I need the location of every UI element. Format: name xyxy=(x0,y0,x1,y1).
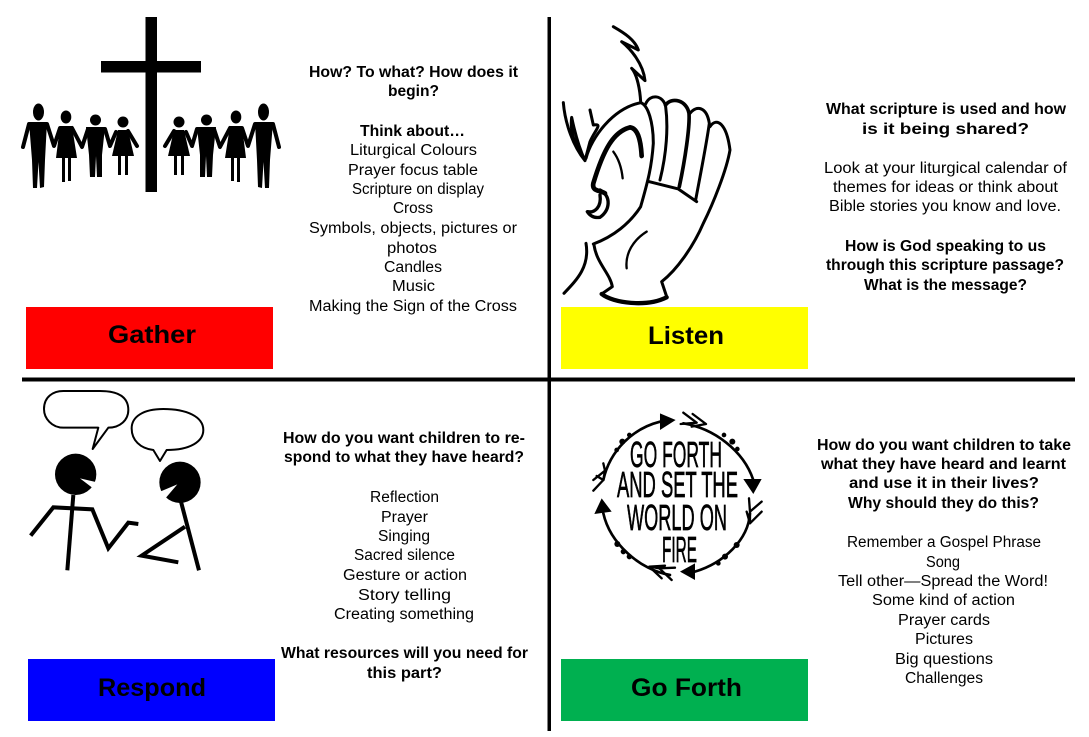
text block: Gather prompts: Scripture on display xyxy=(352,181,484,198)
text block: Listen prompts: Look at your liturgical calendar of xyxy=(824,160,1068,177)
text block: Listen prompts: through this scripture passage? xyxy=(826,257,1064,274)
text block: Go Forth prompts: and use it in their lives? xyxy=(849,475,1039,492)
panel: Listen xyxy=(561,27,1068,369)
text block: Gather prompts: Liturgical Colours xyxy=(350,142,477,159)
text block: Respond prompts: Prayer xyxy=(381,509,428,526)
text block: Listen prompts: What scripture is used and how xyxy=(826,101,1067,118)
icon: circle of arrows with slogan: AND SET THE xyxy=(617,464,738,505)
heading: Go Forth: Go Forth xyxy=(631,674,742,702)
text block: Gather prompts: How? To what? How does it xyxy=(309,64,518,81)
text block: Respond prompts: Reflection xyxy=(370,489,439,506)
text block: Respond prompts: Gesture or action xyxy=(343,567,467,584)
text block: Respond prompts: spond to what they have heard? xyxy=(284,449,524,466)
text block: Respond prompts: Sacred silence xyxy=(354,547,455,564)
text block: Respond prompts: How do you want children to re- xyxy=(283,430,525,447)
text block: Gather prompts: photos xyxy=(387,240,437,257)
text block: Gather prompts: Making the Sign of the Cross xyxy=(309,298,517,315)
text block: Go Forth prompts: Prayer cards xyxy=(898,612,990,629)
text block: Listen prompts: How is God speaking to us xyxy=(845,238,1046,255)
text block: Go Forth prompts xyxy=(817,437,1071,687)
icon: cross with people holding hands xyxy=(23,17,279,192)
text block: Respond prompts: Story telling xyxy=(358,587,451,604)
panel: Go Forth xyxy=(561,413,1071,721)
icon: circle of arrows with slogan: FIRE xyxy=(662,529,697,570)
text block: Gather prompts: Music xyxy=(392,278,435,295)
text block: Go Forth prompts: Some kind of action xyxy=(872,592,1015,609)
icon: hand cupped to ear xyxy=(563,27,730,303)
heading: Respond xyxy=(28,659,275,721)
text block: Gather prompts: Think about… xyxy=(360,123,465,140)
heading: Listen xyxy=(561,307,808,369)
text block: Go Forth prompts: Remember a Gospel Phrase xyxy=(847,534,1041,551)
text block: Respond prompts: Creating something xyxy=(334,606,474,623)
text block: Go Forth prompts: Tell other—Spread the Word! xyxy=(838,573,1048,590)
text block: Go Forth prompts: Song xyxy=(926,554,960,571)
text block: Gather prompts: begin? xyxy=(388,83,439,100)
heading: Listen: Listen xyxy=(648,322,724,350)
text block: Go Forth prompts: Why should they do this? xyxy=(848,495,1039,512)
text block: Respond prompts: this part? xyxy=(367,665,442,682)
heading: Go Forth xyxy=(561,659,808,721)
text block: Gather prompts: Cross xyxy=(393,200,433,217)
text block: Gather prompts: Candles xyxy=(384,259,442,276)
text block: Go Forth prompts: Big questions xyxy=(895,651,993,668)
text block: Listen prompts: What is the message? xyxy=(864,277,1027,294)
icon: circle of arrows with slogan xyxy=(593,413,762,580)
text block: Respond prompts xyxy=(281,430,528,682)
icon: circle of arrows with slogan: WORLD ON xyxy=(627,497,727,538)
icon: two stick figures talking xyxy=(31,391,203,570)
heading: Gather xyxy=(26,307,273,369)
text block: Gather prompts xyxy=(309,64,518,315)
text block: Listen prompts: is it being shared? xyxy=(862,121,1029,138)
icon: circle of arrows with slogan: GO FORTH xyxy=(630,434,722,475)
heading: Gather: Gather xyxy=(108,321,196,349)
panel: Respond xyxy=(28,391,528,721)
text block: Listen prompts: Bible stories you know and love. xyxy=(829,198,1061,215)
text block: Go Forth prompts: Challenges xyxy=(905,670,983,687)
text block: Listen prompts: themes for ideas or think about xyxy=(833,179,1059,196)
text block: Listen prompts xyxy=(824,101,1068,294)
text block: Respond prompts: Singing xyxy=(378,528,430,545)
panel: Gather xyxy=(23,17,518,369)
text block: Gather prompts: Prayer focus table xyxy=(348,162,478,179)
text block: Respond prompts: What resources will you need for xyxy=(281,645,528,662)
heading: Respond: Respond xyxy=(98,674,206,702)
text block: Gather prompts: Symbols, objects, pictures or xyxy=(309,220,517,237)
text block: Go Forth prompts: what they have heard and learnt xyxy=(820,456,1066,473)
text block: Go Forth prompts: Pictures xyxy=(915,631,973,648)
text block: Go Forth prompts: How do you want children to take xyxy=(817,437,1071,454)
